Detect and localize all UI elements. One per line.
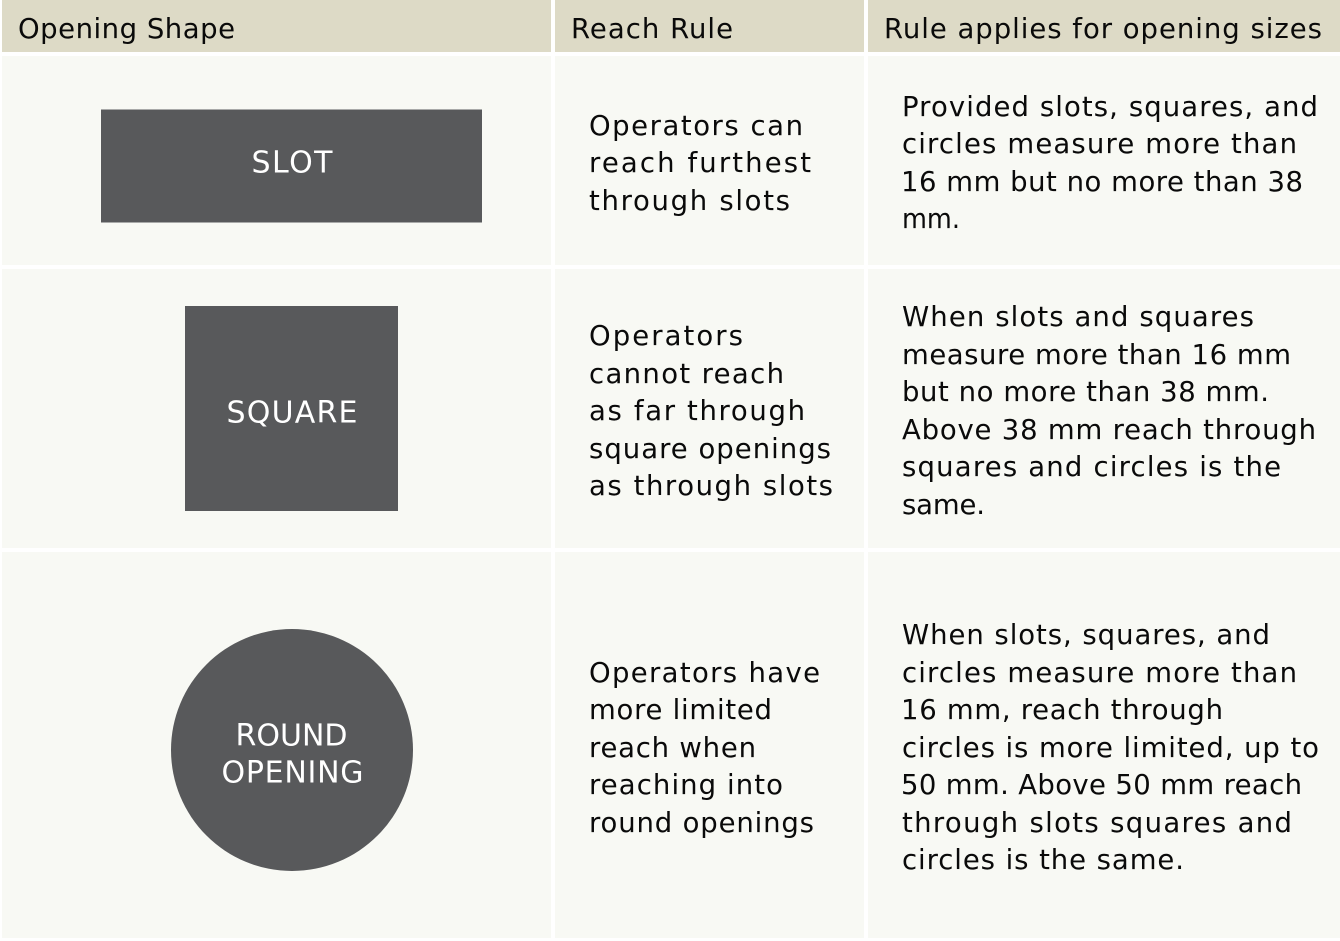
text: round reach rule: reaching into [589,769,783,801]
row: square [2,269,1340,548]
text: slot reach rule: reach furthest [589,147,811,179]
icon: square shape [185,306,398,511]
text: square size rule: When slots and squares [902,301,1254,333]
text: round size rule: circles measure more than [902,657,1297,689]
text: round size rule: circles is more limited, up to [902,732,1319,764]
text: round reach rule: reach when [589,732,756,764]
icon: slot shape: SLOT [252,146,333,180]
row: round opening [2,552,1340,938]
text: round reach rule: Operators have [589,657,820,689]
text: square reach rule: as far through [589,395,805,427]
text: round size rule: through slots squares and [902,807,1292,839]
icon: round shape [171,629,413,871]
text: slot reach rule: through slots [589,185,790,217]
text: square size rule: squares and circles is the [902,451,1281,483]
icon: round shape: ROUND [236,718,348,754]
text: round size rule [901,619,1319,876]
text: slot size rule: Provided slots, squares, and [902,91,1318,123]
text: square reach rule: square openings [589,433,831,465]
text: square size rule: Above 38 mm reach through [902,414,1316,446]
text: square reach rule [589,320,833,502]
text: round reach rule: more limited [589,694,772,726]
header row [2,0,1340,52]
text: square reach rule: cannot reach [589,358,784,390]
text: round size rule: When slots, squares, and [902,619,1270,651]
text: slot reach rule [589,110,811,217]
text: slot size rule: mm. [902,203,960,235]
text: round reach rule [589,657,820,839]
heading: opening shape: Opening Shape [18,13,235,45]
icon: square shape: SQUARE [226,396,358,430]
text: square size rule: but no more than 38 mm. [902,376,1269,408]
text: slot size rule: 16 mm but no more than 38 [901,166,1303,198]
text: slot size rule: circles measure more than [902,128,1297,160]
heading: rule applies: Rule applies for opening sizes [884,13,1322,45]
text: slot reach rule: Operators can [589,110,803,142]
text: round reach rule: round openings [589,807,814,839]
text: round size rule: 16 mm, reach through [901,694,1223,726]
heading: reach rule: Reach Rule [571,13,733,45]
row: slot [2,56,1340,265]
text: square size rule [902,301,1316,521]
text: square reach rule: Operators [589,320,743,352]
text: round size rule: circles is the same. [902,844,1184,876]
text: round size rule: 50 mm. Above 50 mm reach [901,769,1302,801]
text: square size rule: measure more than 16 mm [902,339,1291,371]
icon: slot shape [101,110,482,222]
text: slot size rule [901,91,1318,235]
icon: round shape: OPENING [222,756,364,790]
text: square size rule: same. [902,489,985,521]
text: square reach rule: as through slots [589,470,833,502]
